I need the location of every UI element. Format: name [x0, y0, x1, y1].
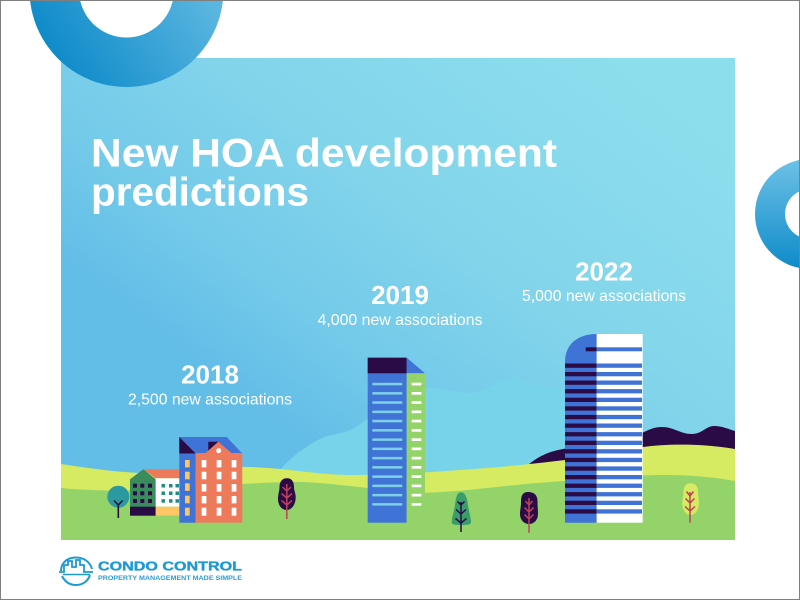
building: 2022 tower	[565, 334, 643, 523]
white house	[143, 469, 180, 516]
title: New HOA development	[91, 132, 557, 176]
tree: yellow	[682, 483, 699, 523]
icon: logo mark	[59, 558, 93, 585]
yellow hill	[61, 445, 735, 500]
logo: Condo Control	[59, 558, 243, 585]
tree: teal	[107, 486, 129, 518]
label: 2019	[318, 280, 482, 329]
logo wordmark: CONDO CONTROL	[98, 560, 242, 574]
label: 2018	[128, 360, 292, 408]
label: 2018: 2018	[181, 360, 239, 390]
decorative ring: right	[755, 159, 800, 269]
title: predictions	[91, 170, 309, 214]
background light hill	[278, 377, 570, 480]
tree: dark 2	[520, 492, 538, 533]
sky panel	[61, 58, 735, 540]
logo tagline: PROPERTY MANAGEMENT MADE SIMPLE	[98, 575, 243, 582]
decorative ring: top	[30, 0, 224, 87]
green ground	[61, 475, 735, 540]
dark mountains	[528, 426, 735, 470]
label: 2019: 4,000 new associations	[318, 312, 482, 329]
building group: 2018	[130, 437, 242, 523]
label: 2022: 2022	[575, 256, 633, 286]
title	[91, 132, 557, 214]
building: 2019 tower	[368, 358, 425, 523]
label: 2019: 2019	[371, 280, 429, 310]
label: 2018: 2,500 new associations	[128, 392, 292, 408]
tree: dark 1	[278, 478, 296, 519]
green house	[130, 469, 156, 516]
label: 2022	[522, 256, 686, 305]
orange tower	[179, 437, 242, 523]
tree: green	[452, 492, 471, 532]
label: 2022: 5,000 new associations	[522, 288, 686, 305]
landscape	[61, 377, 735, 540]
